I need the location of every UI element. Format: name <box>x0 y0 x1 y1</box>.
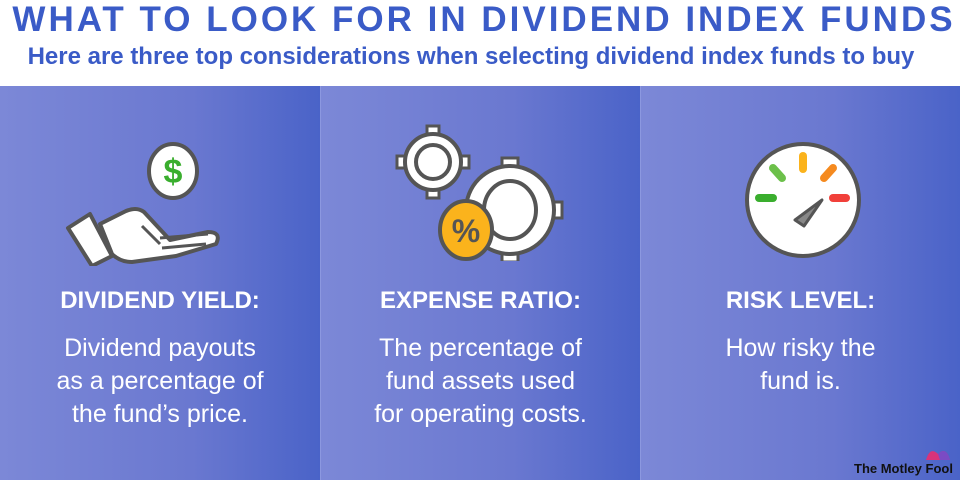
subtitle: Here are three top considerations when selecting dividend index funds to buy <box>28 43 914 70</box>
heading: EXPENSE RATIO: <box>380 287 581 314</box>
icon: gears with percent: % <box>452 213 480 249</box>
heading: DIVIDEND YIELD: <box>60 287 260 314</box>
body text: as a percentage of <box>56 367 264 395</box>
logo: The Motley Fool <box>854 461 953 476</box>
panel: risk level <box>640 86 960 480</box>
body text: How risky the <box>725 334 876 362</box>
body text: for operating costs. <box>374 400 587 428</box>
icon: hand with coin: $ <box>164 153 183 191</box>
body text: fund is. <box>760 367 841 395</box>
panel: expense ratio <box>320 86 640 480</box>
panel: dividend yield <box>0 86 320 480</box>
body text <box>374 334 587 428</box>
body text <box>56 334 264 428</box>
body text: Dividend payouts <box>64 334 256 362</box>
icon: hand with coin <box>66 142 220 266</box>
body text: the fund’s price. <box>72 400 248 428</box>
body text: The percentage of <box>379 334 582 362</box>
title: WHAT TO LOOK FOR IN DIVIDEND INDEX FUNDS <box>12 0 956 39</box>
heading: RISK LEVEL: <box>726 287 875 314</box>
body text <box>725 334 876 395</box>
icon: gears with percent <box>396 124 564 261</box>
logo <box>854 451 953 476</box>
body text: fund assets used <box>386 367 575 395</box>
icon: gauge <box>745 142 861 258</box>
